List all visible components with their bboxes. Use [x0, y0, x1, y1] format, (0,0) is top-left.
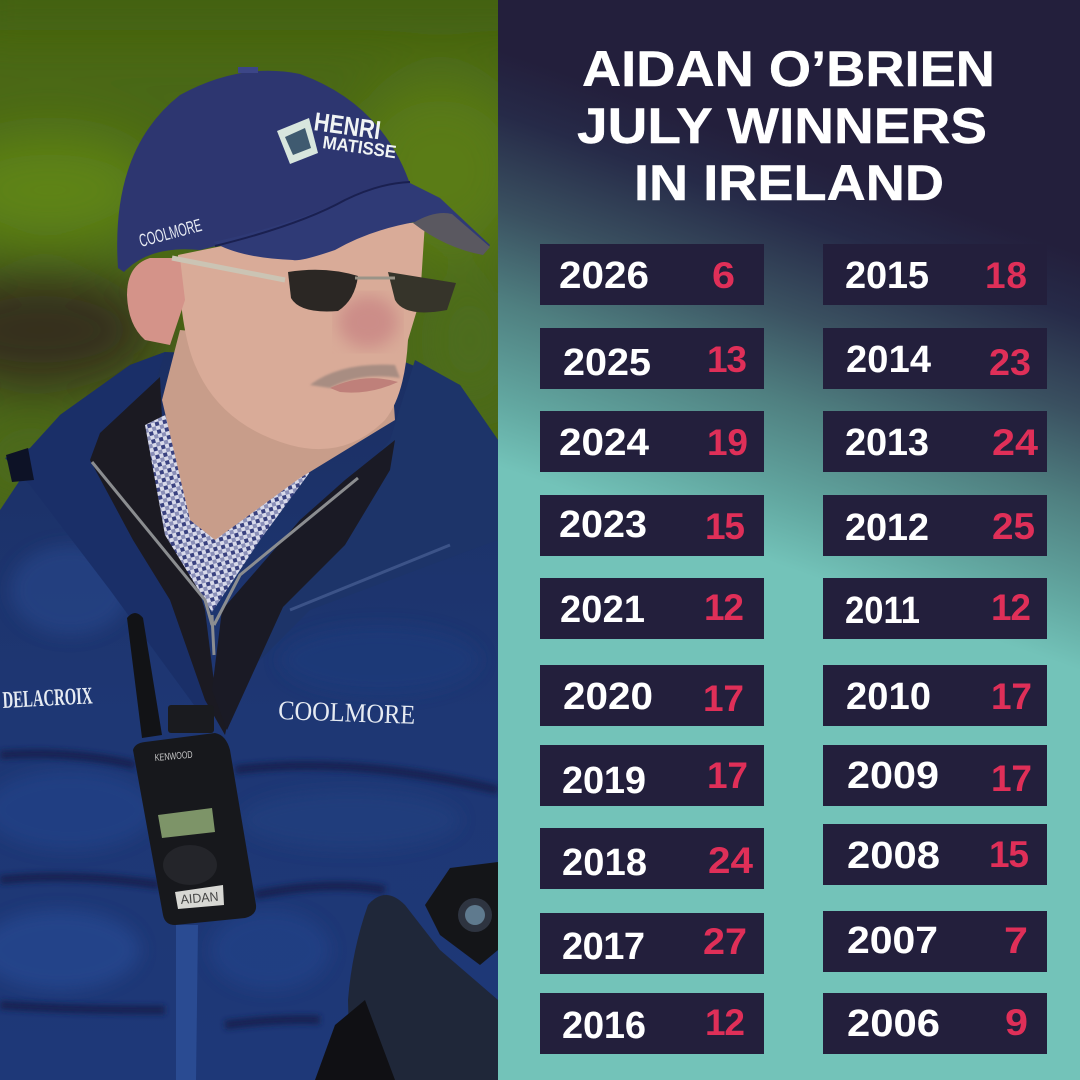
radio handset: KENWOOD	[154, 750, 193, 764]
row: 2013	[823, 411, 1047, 472]
row: 2023: 2023	[559, 504, 647, 546]
row: 2020: 17	[703, 678, 744, 719]
title: JULY WINNERS	[577, 98, 987, 154]
row: 2007: 7	[1004, 920, 1028, 961]
row: 2019: 17	[707, 755, 748, 796]
row: 2015	[823, 244, 1047, 305]
row: 2006: 9	[1005, 1002, 1028, 1043]
moustache and mouth	[310, 365, 400, 388]
row: 2010	[823, 665, 1047, 726]
jacket hood collars	[5, 352, 215, 720]
row: 2021	[540, 578, 764, 639]
row: 2018: 2018	[562, 842, 647, 884]
row: 2016: 12	[705, 1002, 745, 1043]
radio handset: AIDAN	[180, 889, 219, 907]
checked shirt	[145, 415, 310, 612]
inner fleece collar	[90, 377, 235, 735]
jacket	[0, 352, 498, 1080]
title	[577, 41, 995, 211]
row: 2020	[540, 665, 764, 726]
row: 2025: 2025	[563, 342, 651, 384]
row: 2026: 6	[712, 255, 735, 296]
row: 2009: 2009	[847, 755, 939, 797]
row: 2010: 2010	[846, 676, 931, 718]
zipper	[92, 462, 358, 655]
row: 2023: 15	[705, 506, 745, 547]
row: 2024: 2024	[559, 422, 649, 464]
nose	[338, 296, 398, 348]
row: 2025: 13	[707, 339, 747, 380]
row: 2011: 12	[991, 587, 1031, 628]
row: 2023	[540, 495, 764, 556]
row: 2017: 27	[703, 921, 747, 962]
jacket brand: Delacroix: DELACROIX	[2, 683, 94, 714]
cap logo: HENRI	[312, 106, 383, 145]
row: 2015: 18	[985, 255, 1027, 296]
row: 2024	[540, 411, 764, 472]
title: AIDAN O’BRIEN	[582, 41, 995, 97]
radio handset	[127, 613, 256, 925]
row: 2016	[540, 993, 764, 1054]
row: 2007: 2007	[847, 920, 938, 962]
row: 2011	[823, 578, 1047, 639]
row: 2009	[823, 745, 1047, 806]
row: 2008: 2008	[847, 835, 940, 877]
row: 2012: 25	[992, 506, 1035, 547]
row: 2017	[540, 913, 764, 974]
row: 2026: 2026	[559, 255, 649, 297]
navy cap	[117, 70, 490, 272]
row: 2007	[823, 911, 1047, 972]
row: 2018	[540, 828, 764, 889]
row: 2014	[823, 328, 1047, 389]
row: 2009: 17	[991, 758, 1032, 799]
neck and face	[127, 222, 425, 540]
row: 2008: 15	[989, 834, 1029, 875]
jacket quilting highlights	[0, 544, 326, 990]
row: 2015: 2015	[845, 255, 929, 297]
cap brand text: COOLMORE	[137, 215, 204, 251]
row: 2021: 12	[704, 587, 744, 628]
panel: statistics background	[498, 0, 1080, 1080]
ear	[127, 258, 185, 345]
center placket	[176, 925, 198, 1080]
row: 2018: 24	[708, 840, 753, 881]
row: 2010: 17	[991, 676, 1032, 717]
cap logo	[277, 112, 396, 164]
row: 2006: 2006	[847, 1003, 940, 1045]
photo: Aidan O'Brien wearing cap and padded jacket	[0, 0, 498, 1080]
row: 2019	[540, 745, 764, 806]
row: 2024: 19	[707, 422, 748, 463]
row: 2026	[540, 244, 764, 305]
row: 2016: 2016	[562, 1005, 646, 1047]
photo background foliage	[0, 0, 498, 510]
row: 2021: 2021	[560, 589, 645, 631]
row: 2020: 2020	[563, 676, 653, 718]
row: 2014: 23	[989, 342, 1031, 383]
row: 2019: 2019	[562, 760, 646, 802]
row: 2012	[823, 495, 1047, 556]
row: 2011: 2011	[845, 590, 920, 632]
radio keypad	[163, 845, 217, 885]
row: 2013: 24	[992, 422, 1038, 463]
row: 2013: 2013	[845, 422, 929, 464]
row: 2017: 2017	[562, 926, 645, 968]
row: 2008	[823, 824, 1047, 885]
title: IN IRELAND	[634, 155, 944, 211]
jacket brand: Coolmore: COOLMORE	[278, 695, 416, 730]
row: 2006	[823, 993, 1047, 1054]
row: 2014: 2014	[846, 339, 931, 381]
gloved hand and binoculars	[315, 862, 498, 1080]
sunglasses	[172, 258, 456, 312]
radio screen	[158, 808, 215, 838]
row: 2025	[540, 328, 764, 389]
cap logo: MATISSE	[321, 132, 398, 162]
row: 2012: 2012	[845, 507, 929, 549]
